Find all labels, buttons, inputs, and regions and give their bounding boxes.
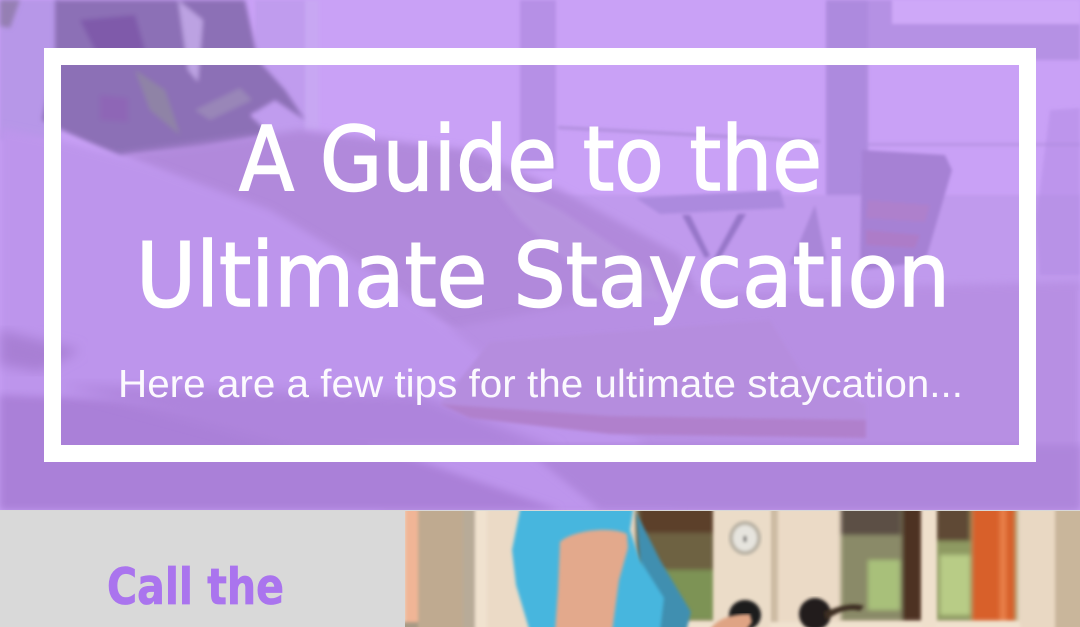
front pillow and duvet left (2, 140, 630, 503)
door lock (729, 521, 761, 555)
pillow highlight (500, 184, 653, 292)
title line 1: A Guide to the (239, 107, 822, 211)
door surround (400, 505, 1080, 627)
door frames between panes (688, 511, 1019, 627)
title line 2: Ultimate Staycation (136, 223, 950, 327)
room architecture (0, 0, 1080, 290)
door glass panes (636, 505, 1017, 621)
tip panel: grey text block (0, 511, 405, 627)
balcony table and lounge chair (636, 108, 1080, 275)
title (136, 107, 950, 327)
plant (0, 0, 305, 156)
tip photo: woman at front door (400, 505, 1080, 627)
white title frame (52, 56, 1028, 454)
duvet shading (0, 395, 560, 510)
arm (555, 530, 628, 627)
bedding right (632, 285, 1080, 446)
hand (708, 614, 752, 627)
shirt strap (636, 512, 691, 627)
door handles (729, 598, 864, 627)
subtitle: Here are a few tips for the ultimate staycation... (118, 363, 963, 406)
tip heading: Call the (107, 558, 284, 616)
shirt (512, 505, 664, 627)
back pillows (127, 128, 694, 328)
open book (443, 354, 866, 438)
